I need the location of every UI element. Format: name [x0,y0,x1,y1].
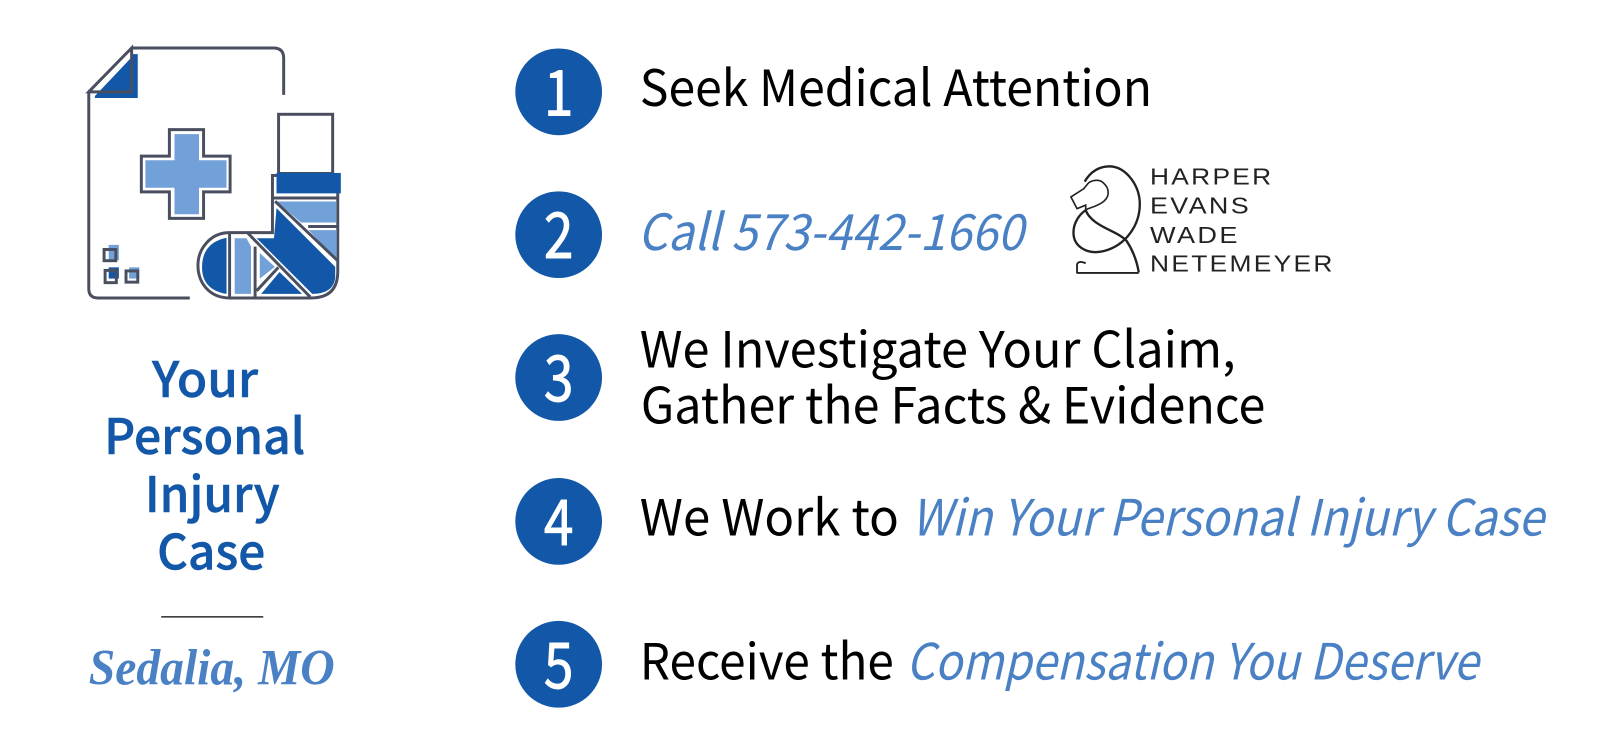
icon: lion logo mark [1071,166,1140,273]
heading: your personal injury case [104,341,305,584]
step 2: 2 [544,186,573,277]
step 3: 3 [544,329,573,420]
logo: harper evans wade netemeyer [1071,164,1335,276]
heading: your personal injury case: Case [157,513,265,584]
icon: foot cast [198,114,341,298]
step 5: Compensation You Deserve [906,623,1482,695]
step 3: We Investigate Your Claim, [640,310,1236,382]
logo: harper evans wade netemeyer: EVANS [1150,192,1251,218]
step 3 [515,310,1265,438]
location: sedalia, mo: Sedalia, MO [89,641,335,697]
step 2: Call 573-442-1660 [638,193,1028,265]
heading: your personal injury case: Personal [104,398,305,469]
step 2 [515,186,1028,278]
step 4: 4 [544,473,573,564]
step 1: Seek Medical Attention [640,49,1152,121]
step 1 [515,43,1152,135]
step 4: We Work to [640,479,899,551]
icon: medical cross [141,130,230,218]
logo: harper evans wade netemeyer: NETEMEYER [1150,250,1335,276]
step 4 [515,473,1548,565]
heading: your personal injury case: Injury [145,456,280,527]
icon: document outline [89,48,284,298]
logo: harper evans wade netemeyer: WADE [1150,222,1240,248]
heading: your personal injury case: Your [151,341,259,412]
step 4: Win Your Personal Injury Case [911,479,1548,551]
step 5 [515,616,1482,708]
step 5: 5 [544,616,573,707]
step 3: Gather the Facts & Evidence [641,366,1265,438]
step 5: Receive the [640,623,894,695]
panel: left column [89,48,341,697]
step 1: 1 [544,43,573,134]
icon: medical document and foot cast [89,48,341,298]
icon: small squares [104,245,139,283]
icon: document fold [89,48,138,98]
logo: harper evans wade netemeyer: HARPER [1150,164,1273,190]
